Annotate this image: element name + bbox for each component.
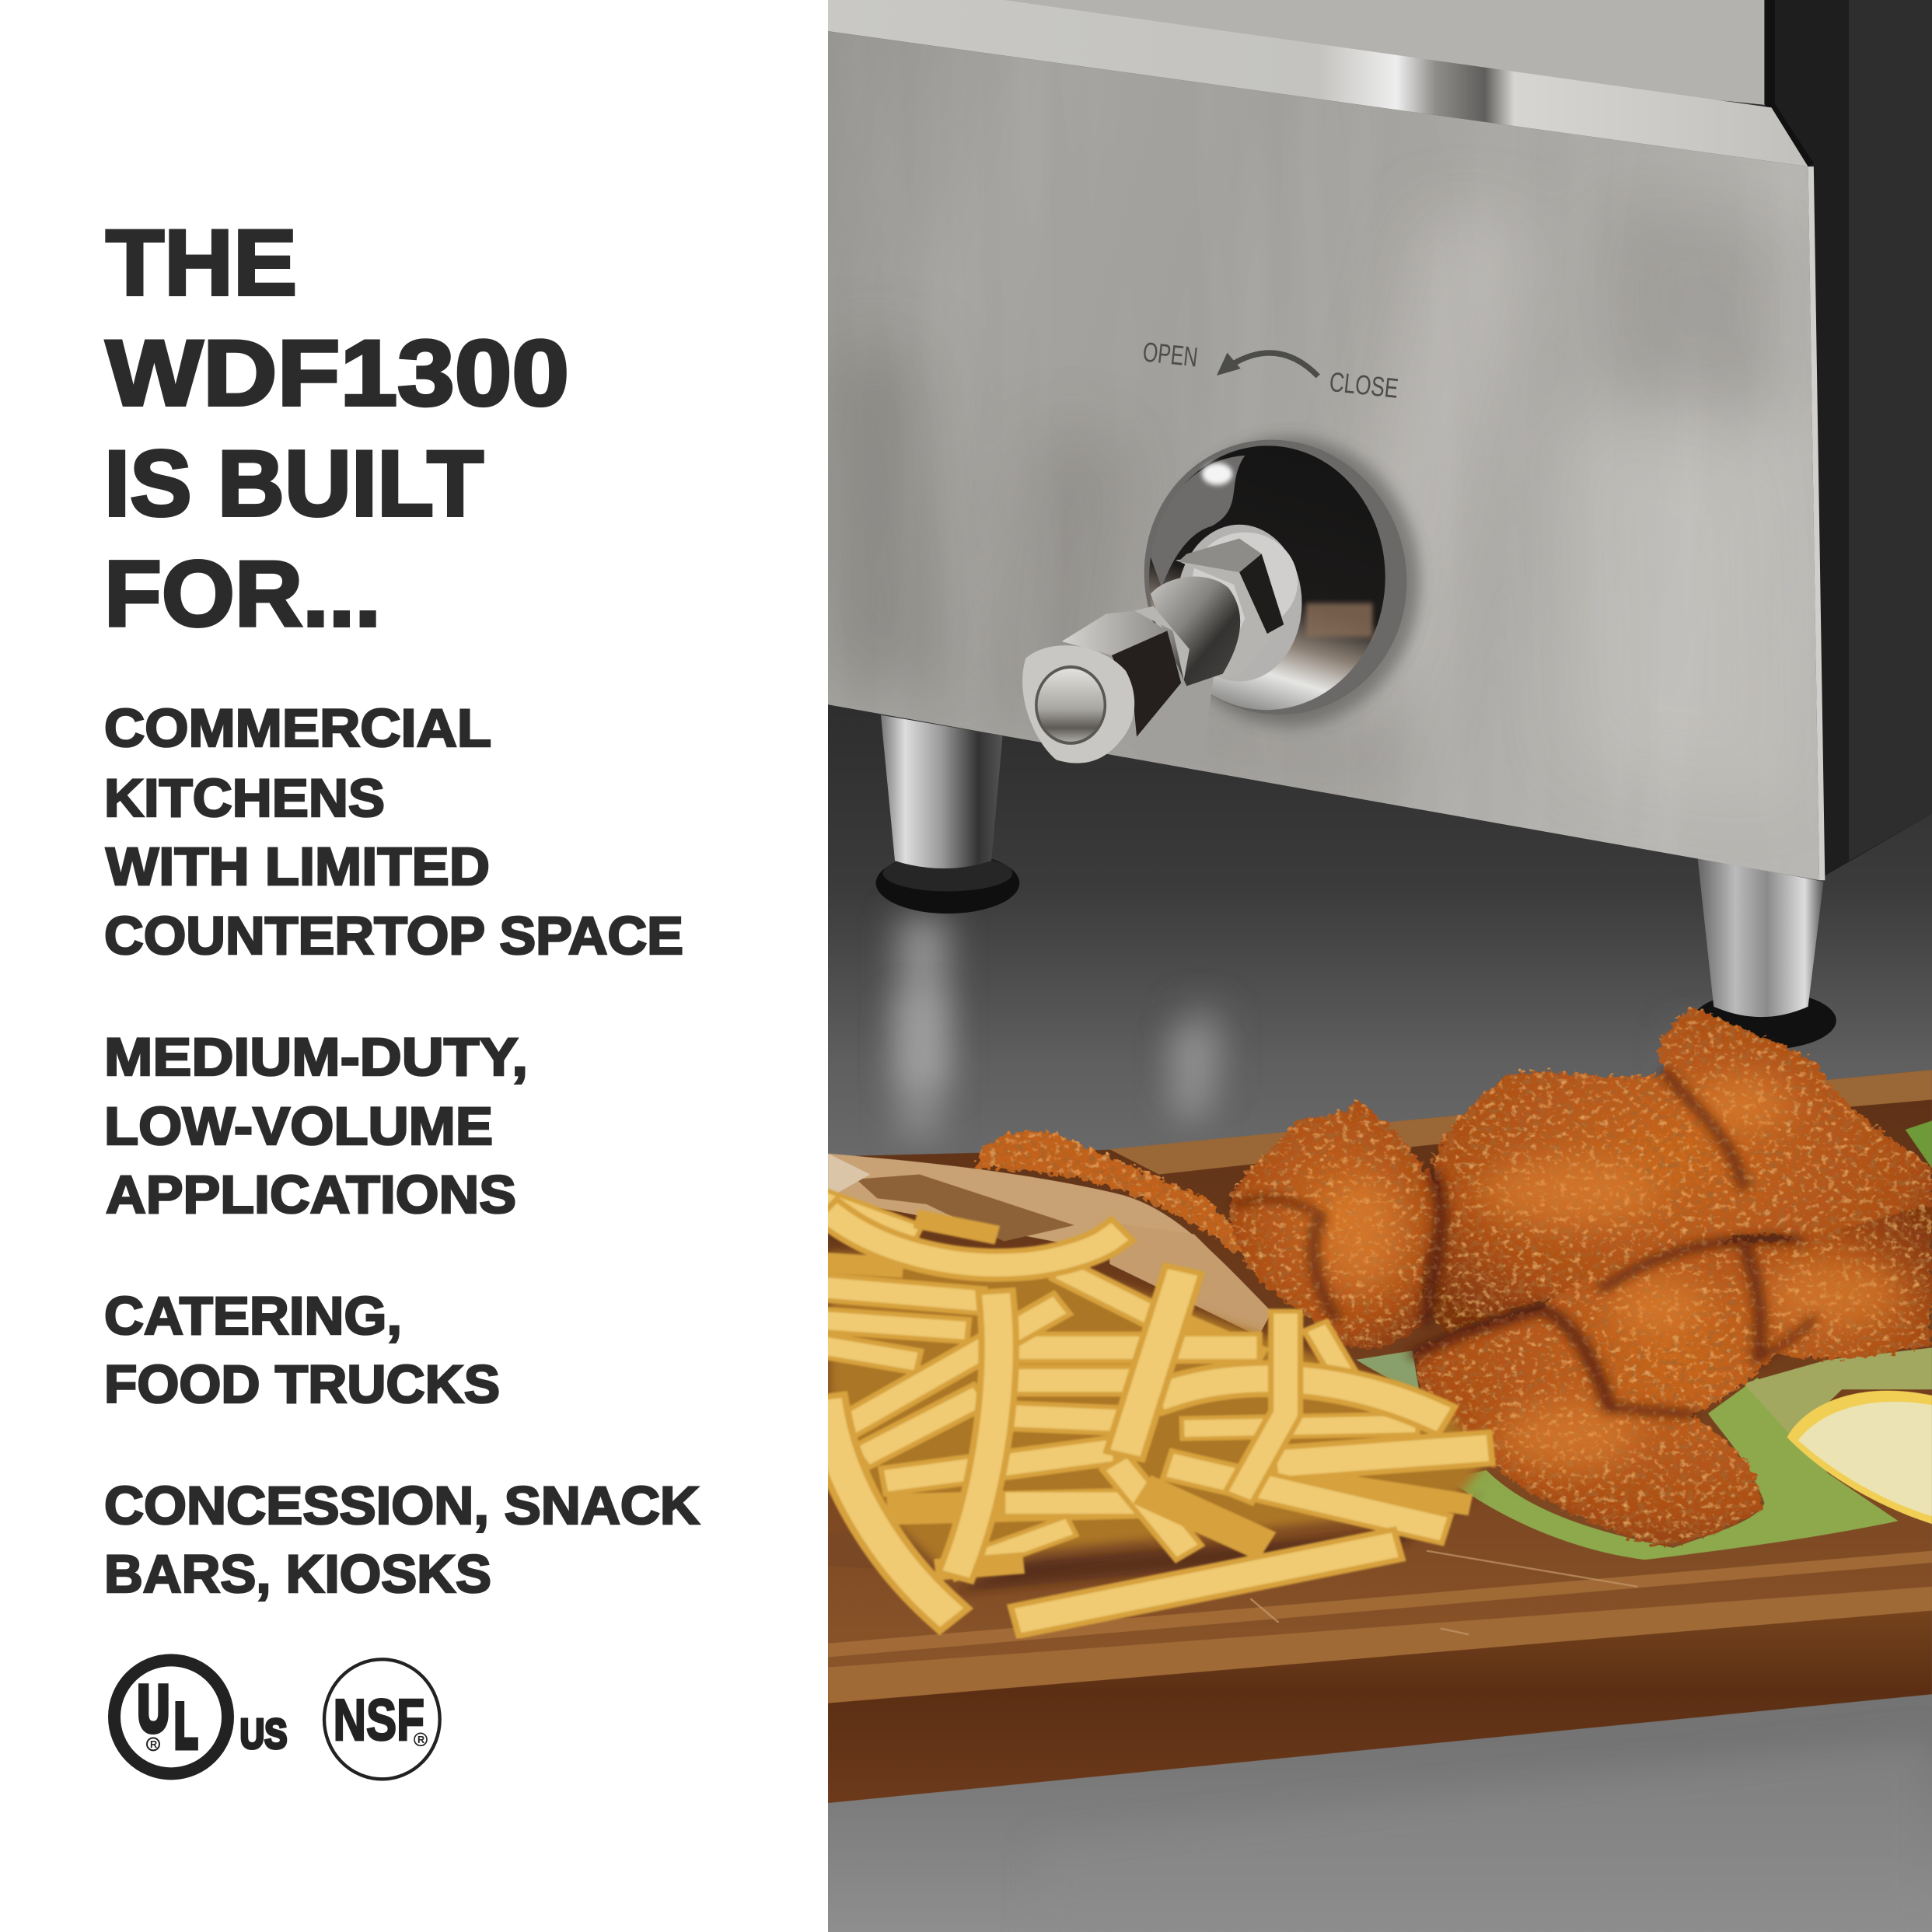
icon: UL mark: U [138,1672,169,1745]
bevel strip [828,0,1808,166]
fryer scene [828,0,1932,1090]
arrow: open direction [1217,353,1318,376]
text block: catering: CATERING, [104,1286,402,1346]
icon: UL mark: R [150,1739,157,1750]
text block: catering [104,1286,500,1414]
marking: OPEN: OPEN [1141,337,1199,373]
right foot [1693,858,1836,1050]
icon: UL mark: L [175,1692,197,1762]
countertop [828,0,1932,1932]
stainless front panel [828,31,1825,885]
chicken shadows [1236,1073,1814,1413]
text block: concession: BARS, KIOSKS [104,1544,491,1604]
food on cutting board [828,995,1932,1932]
label: US: US [240,1712,287,1758]
text block: medium-duty: APPLICATIONS [106,1165,516,1225]
counter highlights [899,995,1932,1932]
text block: concession: CONCESSION, SNACK [104,1476,700,1535]
left foot [876,715,1019,914]
text block: medium-duty [104,1027,528,1225]
valve arm [1151,577,1240,686]
lettuce [1356,1120,1932,1560]
text block: medium-duty: MEDIUM-DUTY, [104,1027,528,1087]
marking: CLOSE: CLOSE [1328,367,1399,404]
title: THE [106,211,297,315]
text block: commercial kitchens [104,698,683,966]
valve stem [1137,669,1214,764]
fries shadow and base [828,1252,1483,1592]
icon: UL mark [114,1660,228,1773]
title: FOR... [104,542,381,646]
title [104,211,569,646]
lemon wedge [1787,1391,1932,1524]
paper cone [828,1154,1272,1577]
text block: medium-duty: LOW-VOLUME [104,1096,493,1156]
hex knob [1022,611,1181,763]
icon: NSF mark: NSF [334,1687,424,1752]
icon: NSF mark [324,1659,440,1779]
chicken highlights [1321,1073,1906,1473]
text block: concession [104,1476,700,1604]
text block: commercial kitchens: KITCHENS [104,768,385,828]
title: IS BUILT [104,431,484,536]
fried chicken [974,1007,1932,1546]
text block: commercial kitchens: WITH LIMITED [106,837,490,896]
drain valve [1022,407,1434,764]
photo panel [828,0,1932,1932]
text block: commercial kitchens: COMMERCIAL [104,698,491,758]
collar ring [1134,606,1190,680]
icon: NSF mark: R [417,1735,424,1745]
upper panel [997,0,1772,106]
wooden board [828,1070,1932,1803]
left white panel [0,0,828,1932]
counter reflections [879,905,1232,1099]
french fries [828,1204,1473,1618]
certification logos [114,1659,440,1779]
text block: catering: FOOD TRUCKS [104,1354,500,1414]
text block: commercial kitchens: COUNTERTOP SPACE [104,906,683,966]
hex nut [1176,539,1284,677]
dark side of fryer [1764,0,1932,880]
title: WDF1300 [106,321,569,425]
